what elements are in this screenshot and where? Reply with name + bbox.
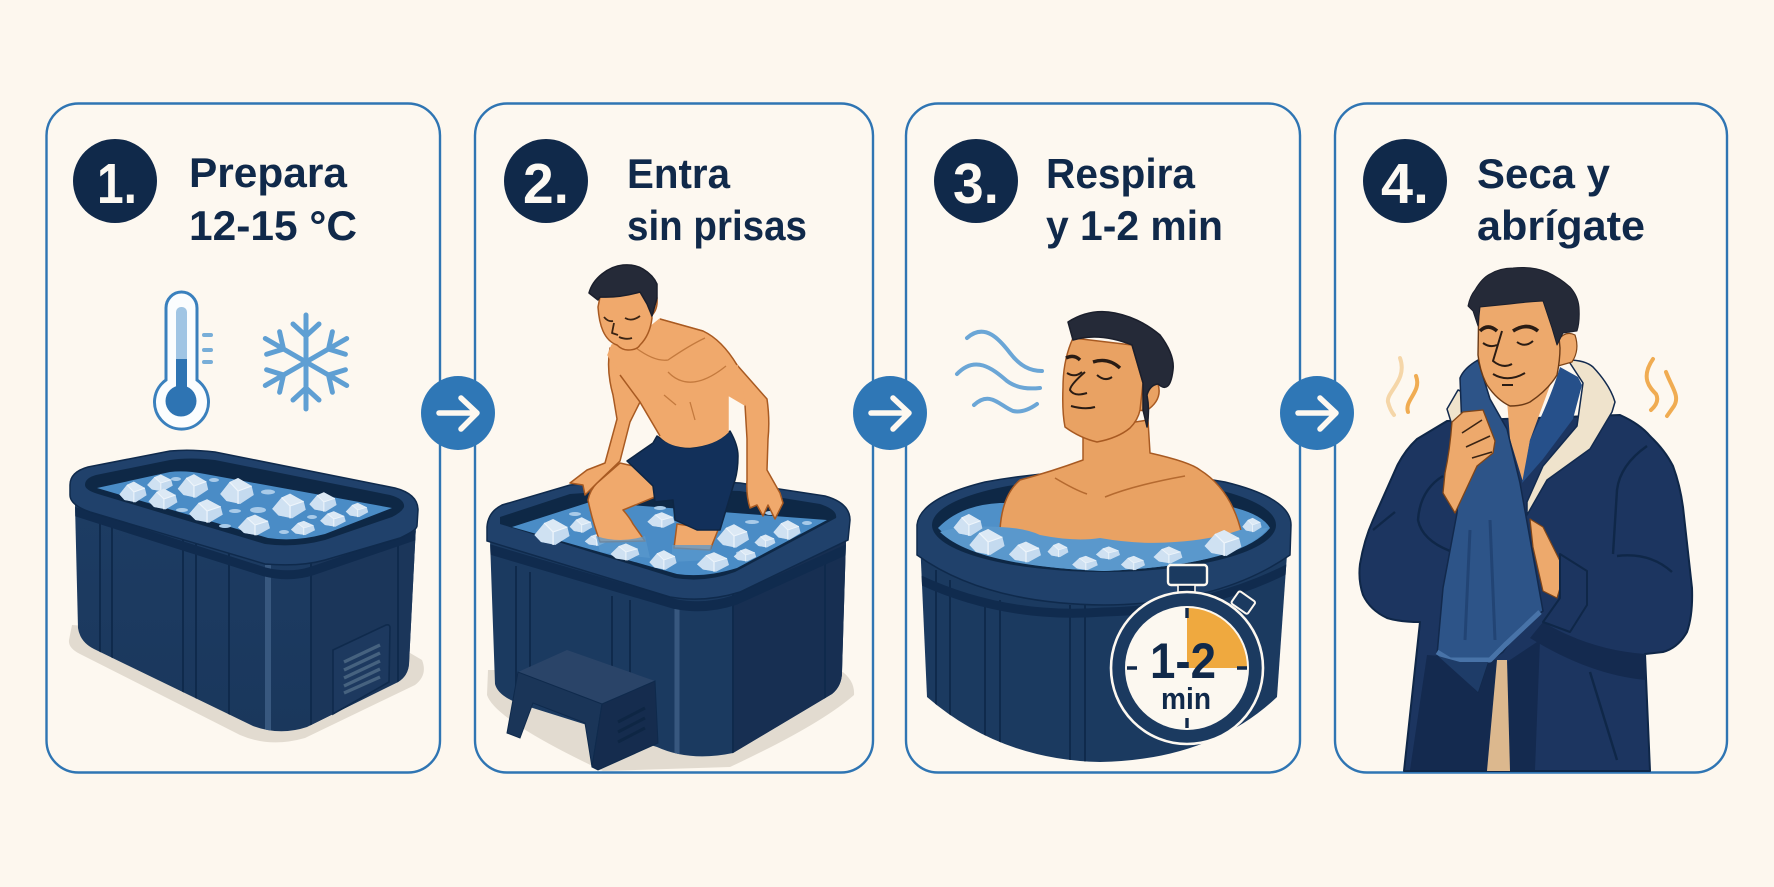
stopwatch label: 1-2 [1150, 633, 1216, 689]
face [1063, 338, 1143, 442]
step stool [507, 650, 658, 770]
man in robe [1359, 268, 1692, 771]
stopwatch label [1150, 633, 1216, 716]
heading step 2: Entra [627, 150, 731, 197]
man stepping in [570, 265, 783, 550]
left collar [1447, 390, 1470, 425]
icon: thermometer [154, 292, 211, 429]
inner strip [1487, 660, 1510, 771]
icon: snowflake [259, 315, 353, 409]
heading step 3 [1046, 150, 1223, 249]
step number 3 [934, 139, 1018, 223]
timer wedge [1187, 608, 1247, 668]
inner blue collar [1522, 367, 1582, 483]
right arm [723, 348, 783, 519]
left leg [588, 463, 655, 542]
hair [1068, 312, 1173, 427]
heading step 4: Seca y [1477, 150, 1611, 197]
stopwatch label: min [1161, 681, 1211, 716]
panel: step 4 seca [1335, 104, 1727, 772]
card outline 1 [46, 104, 440, 772]
vent panel [333, 625, 390, 714]
torso [608, 319, 745, 447]
heading step 2 [627, 150, 807, 249]
step number 2: 2. [523, 152, 569, 216]
heading step 4 [1477, 150, 1645, 249]
eyes brows nose mouth [1480, 326, 1538, 385]
icon: breath waves [957, 332, 1042, 412]
water and ice over legs [596, 536, 729, 572]
card outline 4 [1335, 104, 1727, 772]
hair [1468, 268, 1579, 345]
panel: step 1 prepara [46, 104, 440, 772]
heading step 1 [189, 149, 357, 249]
round ice tub [910, 312, 1295, 765]
arrow: step 1 to 2 [421, 376, 495, 450]
left hand [1443, 410, 1495, 513]
right leg [674, 524, 718, 550]
man in tub [1000, 312, 1242, 548]
arrow: step 3 to 4 [1280, 376, 1354, 450]
ice tub with shadow [69, 450, 424, 742]
neck [1507, 380, 1552, 482]
left arm [570, 348, 640, 495]
card outline 3 [906, 104, 1300, 772]
ear [1138, 382, 1159, 411]
ear [1558, 333, 1577, 366]
neck and shoulders [1000, 420, 1242, 548]
step number 4: 4. [1381, 152, 1429, 216]
icon: warmth waves [1388, 358, 1676, 416]
closed eye and mouth [604, 316, 640, 339]
right cuff [1543, 554, 1587, 632]
tub with step stool [485, 481, 854, 771]
right hand [1530, 519, 1560, 598]
step number 3: 3. [953, 152, 999, 216]
panel: step 3 respira [906, 104, 1300, 772]
towel [1437, 360, 1543, 692]
arrow: step 2 to 3 [853, 376, 927, 450]
shorts [627, 431, 738, 530]
stopwatch [1111, 565, 1263, 744]
step number 2 [504, 139, 588, 223]
heading step 1: 12-15 °C [189, 202, 357, 249]
shearling collar [1527, 360, 1615, 515]
ear [647, 293, 657, 316]
heading step 3: Respira [1046, 150, 1196, 197]
step number 1: 1. [97, 152, 137, 216]
heading step 4: abrígate [1477, 202, 1645, 249]
head [598, 288, 652, 350]
step number 1 [73, 139, 157, 223]
heading step 3: y 1-2 min [1046, 202, 1223, 249]
eyes brows nose mouth [1066, 356, 1120, 408]
water line and ice [940, 514, 1268, 571]
heading step 1: Prepara [189, 149, 348, 196]
card outline 2 [475, 104, 873, 772]
step number 4 [1363, 139, 1447, 223]
hair [589, 265, 657, 316]
robe [1359, 415, 1692, 771]
face [1478, 295, 1560, 406]
panel: step 2 entra [475, 104, 873, 772]
robe shadow [1410, 622, 1646, 770]
heading step 2: sin prisas [627, 202, 807, 249]
